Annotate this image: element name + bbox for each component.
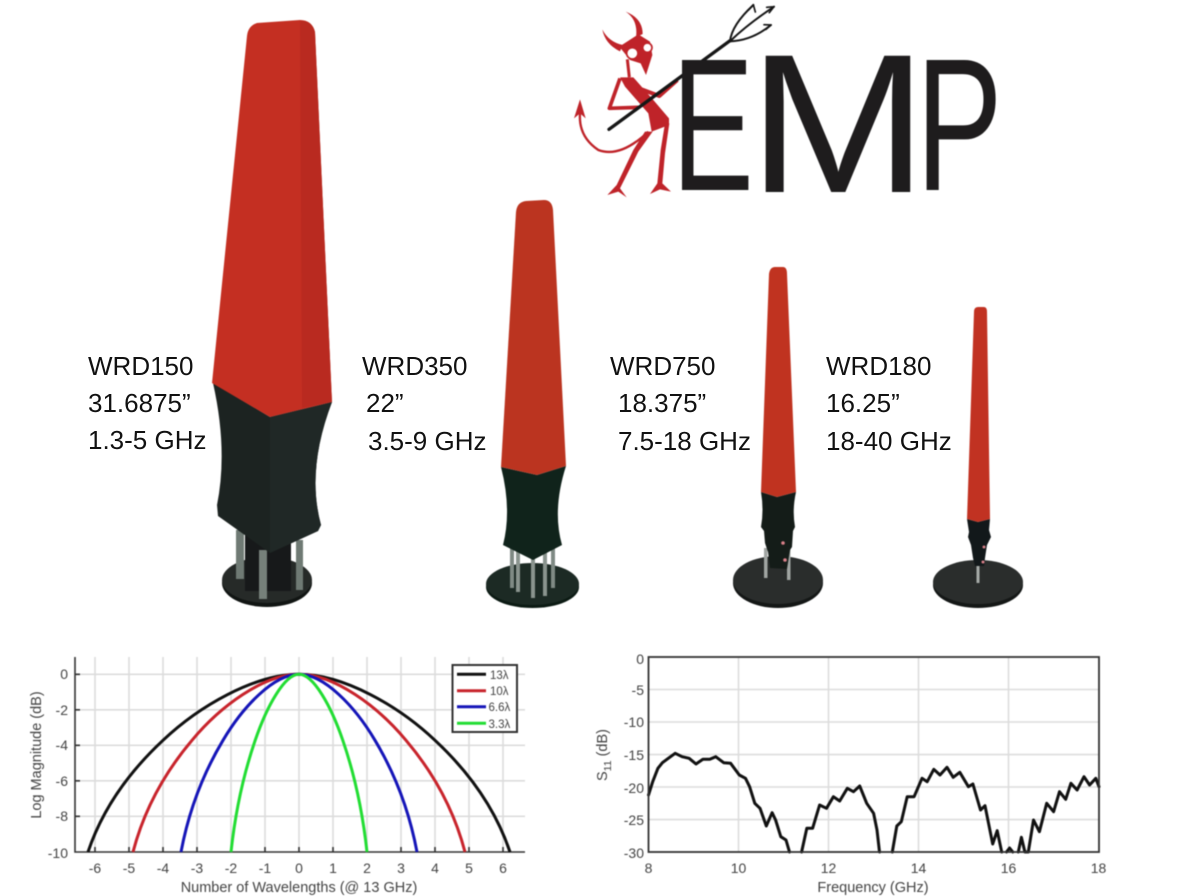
y tick labels: -4 bbox=[56, 737, 68, 753]
label: WRD180 specs: WRD180 bbox=[826, 351, 931, 381]
label: WRD180 specs: 16.25” bbox=[826, 388, 900, 418]
logo letter M: M bbox=[748, 12, 928, 234]
icon: pitchfork bbox=[609, 5, 774, 129]
x tick labels: 14 bbox=[911, 860, 926, 876]
y axis title: (dB) bbox=[595, 729, 611, 760]
label: WRD750 specs: WRD750 bbox=[610, 351, 715, 381]
chart: log magnitude vs wavelengths bbox=[29, 657, 525, 896]
plot frame bbox=[648, 657, 1099, 852]
S11 curve bbox=[648, 753, 1099, 852]
y tick labels: -10 bbox=[48, 845, 68, 861]
x axis title: Number of Wavelengths (@ 13 GHz) bbox=[181, 880, 417, 896]
y axis title: S bbox=[595, 771, 611, 781]
y tick labels: 0 bbox=[60, 666, 68, 682]
y tick labels: -2 bbox=[56, 702, 68, 718]
legend: 3.3λ bbox=[488, 719, 510, 731]
curve: 13 lambda bbox=[88, 674, 510, 852]
label: WRD750 specs: 18.375” bbox=[618, 388, 706, 418]
x tick labels: 10 bbox=[731, 860, 746, 876]
curve: 3.3 lambda bbox=[231, 674, 367, 852]
label: WRD150 specs: 1.3-5 GHz bbox=[88, 425, 206, 455]
x tick labels: 1 bbox=[329, 860, 337, 876]
x tick labels: -1 bbox=[259, 860, 271, 876]
x tick labels: -2 bbox=[225, 860, 237, 876]
x tick labels: 0 bbox=[295, 860, 303, 876]
antenna: WRD750 bbox=[733, 267, 823, 608]
x tick labels: 4 bbox=[431, 860, 439, 876]
axes bbox=[75, 657, 525, 852]
y tick labels: -30 bbox=[624, 845, 644, 861]
y tick labels: -6 bbox=[56, 773, 68, 789]
y tick labels: -15 bbox=[624, 747, 644, 763]
x tick labels bbox=[645, 860, 1106, 876]
x tick labels: 18 bbox=[1091, 860, 1106, 876]
x tick labels: 6 bbox=[499, 860, 507, 876]
logo letter E: E bbox=[672, 19, 754, 230]
antenna: WRD180 bbox=[933, 307, 1023, 608]
x tick labels: -6 bbox=[89, 860, 101, 876]
x tick labels: 12 bbox=[821, 860, 836, 876]
chart: S11 vs frequency bbox=[595, 651, 1106, 896]
grid bbox=[75, 657, 525, 852]
grid bbox=[648, 657, 1099, 852]
label: WRD180 specs bbox=[826, 351, 952, 456]
y axis title: 11 bbox=[602, 760, 614, 771]
y tick labels: -8 bbox=[56, 808, 68, 824]
x tick labels: -3 bbox=[191, 860, 203, 876]
curve: 10 lambda bbox=[133, 674, 465, 852]
y axis title: Log Magnitude (dB) bbox=[29, 691, 45, 819]
label: WRD350 specs: WRD350 bbox=[362, 351, 467, 381]
x tick labels: -4 bbox=[157, 860, 169, 876]
label: WRD180 specs: 18-40 GHz bbox=[826, 426, 952, 456]
legend bbox=[452, 665, 517, 732]
label: WRD150 specs: WRD150 bbox=[88, 351, 193, 381]
label: WRD150 specs bbox=[88, 351, 206, 455]
y tick labels: -20 bbox=[624, 780, 644, 796]
x tick labels bbox=[89, 860, 507, 876]
legend: 10λ bbox=[490, 686, 509, 698]
y tick labels bbox=[624, 651, 644, 861]
label: WRD350 specs bbox=[362, 351, 486, 456]
logo: EMP with devil bbox=[574, 5, 1002, 234]
legend: 6.6λ bbox=[488, 702, 510, 714]
icon: devil mascot bbox=[574, 12, 677, 197]
x tick labels: 3 bbox=[397, 860, 405, 876]
x tick labels: 5 bbox=[465, 860, 473, 876]
curve: 6.6 lambda bbox=[181, 674, 417, 852]
label: WRD750 specs: 7.5-18 GHz bbox=[618, 426, 751, 456]
y tick labels: -5 bbox=[632, 682, 644, 698]
legend: 13λ bbox=[490, 670, 509, 682]
label: WRD150 specs: 31.6875” bbox=[88, 388, 191, 418]
antenna: WRD350 bbox=[486, 200, 579, 608]
y tick labels: 0 bbox=[636, 651, 644, 667]
label: WRD750 specs bbox=[610, 351, 751, 456]
label: WRD350 specs: 22” bbox=[366, 388, 404, 418]
y tick labels: -25 bbox=[624, 812, 644, 828]
x tick labels: 16 bbox=[1001, 860, 1016, 876]
x tick labels: 8 bbox=[645, 860, 653, 876]
y tick labels: -10 bbox=[624, 714, 644, 730]
label: WRD350 specs: 3.5-9 GHz bbox=[368, 426, 486, 456]
x axis title: Frequency (GHz) bbox=[817, 880, 929, 896]
x tick labels: -5 bbox=[123, 860, 135, 876]
y tick labels bbox=[48, 666, 68, 861]
logo letter P: P bbox=[916, 20, 1002, 231]
x tick labels: 2 bbox=[363, 860, 371, 876]
antenna: WRD150 bbox=[212, 20, 332, 607]
